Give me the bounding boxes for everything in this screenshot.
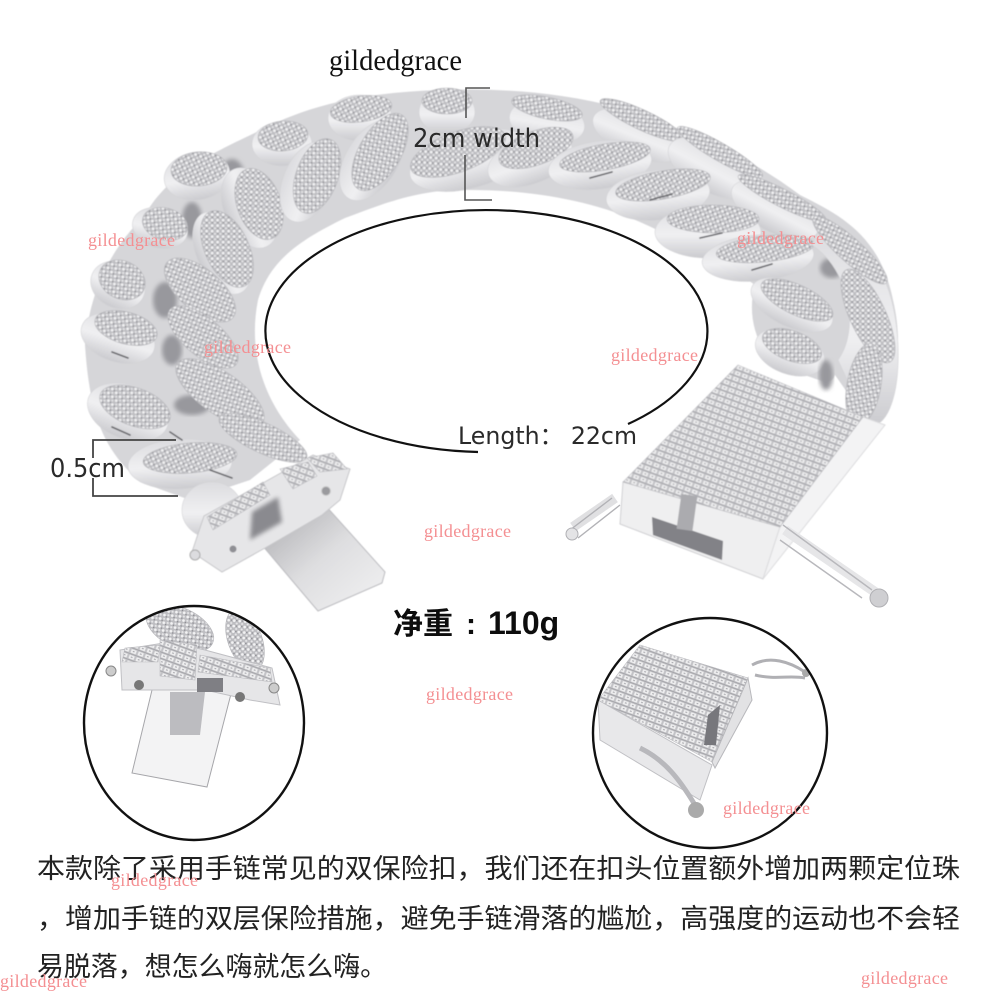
watermarks: gildedgrace bbox=[111, 870, 198, 890]
label: net weight: 110g bbox=[488, 605, 559, 641]
description paragraph: ，增加手链的双层保险措施，避免手链滑落的尴尬，高强度的运动也不会轻 bbox=[37, 904, 960, 934]
label: width: 2cm width bbox=[413, 124, 540, 154]
watermarks: gildedgrace bbox=[737, 228, 824, 248]
left clasp with tongue bbox=[182, 453, 385, 611]
2cm width bracket bbox=[465, 88, 492, 200]
bracelet: curb chain bbox=[74, 88, 906, 500]
detail circle: pave clasp bbox=[593, 618, 827, 848]
watermarks: gildedgrace bbox=[861, 968, 948, 988]
description paragraph: 易脱落，想怎么嗨就怎么嗨。 bbox=[37, 952, 387, 982]
label: length: Length： 22cm bbox=[458, 422, 637, 450]
description paragraph: 本款除了采用手链常见的双保险扣，我们还在扣头位置额外增加两颗定位珠 bbox=[37, 854, 960, 884]
label: net weight bbox=[393, 605, 559, 641]
label: net weight: 净重 bbox=[393, 608, 453, 641]
detail circle: tongue clasp bbox=[84, 595, 304, 840]
0.5cm bracket bbox=[93, 440, 178, 496]
watermarks: gildedgrace bbox=[611, 345, 698, 365]
watermarks: gildedgrace bbox=[723, 798, 810, 818]
right clasp, pave box bbox=[620, 365, 885, 579]
top centre links bbox=[403, 88, 588, 203]
right side links bbox=[545, 91, 906, 429]
watermarks: gildedgrace bbox=[426, 684, 513, 704]
watermarks: gildedgrace bbox=[424, 521, 511, 541]
label: thickness: 0.5cm bbox=[50, 454, 125, 484]
watermarks: gildedgrace bbox=[204, 337, 291, 357]
label: net weight: : bbox=[466, 608, 476, 641]
watermarks bbox=[0, 228, 948, 991]
left side links bbox=[74, 92, 420, 492]
description paragraph bbox=[37, 854, 960, 982]
bracelet length oval bbox=[265, 210, 707, 452]
title: gildedgrace bbox=[329, 44, 462, 77]
watermarks: gildedgrace bbox=[88, 230, 175, 250]
right clasp pins bbox=[566, 498, 888, 607]
watermarks: gildedgrace bbox=[0, 971, 87, 991]
